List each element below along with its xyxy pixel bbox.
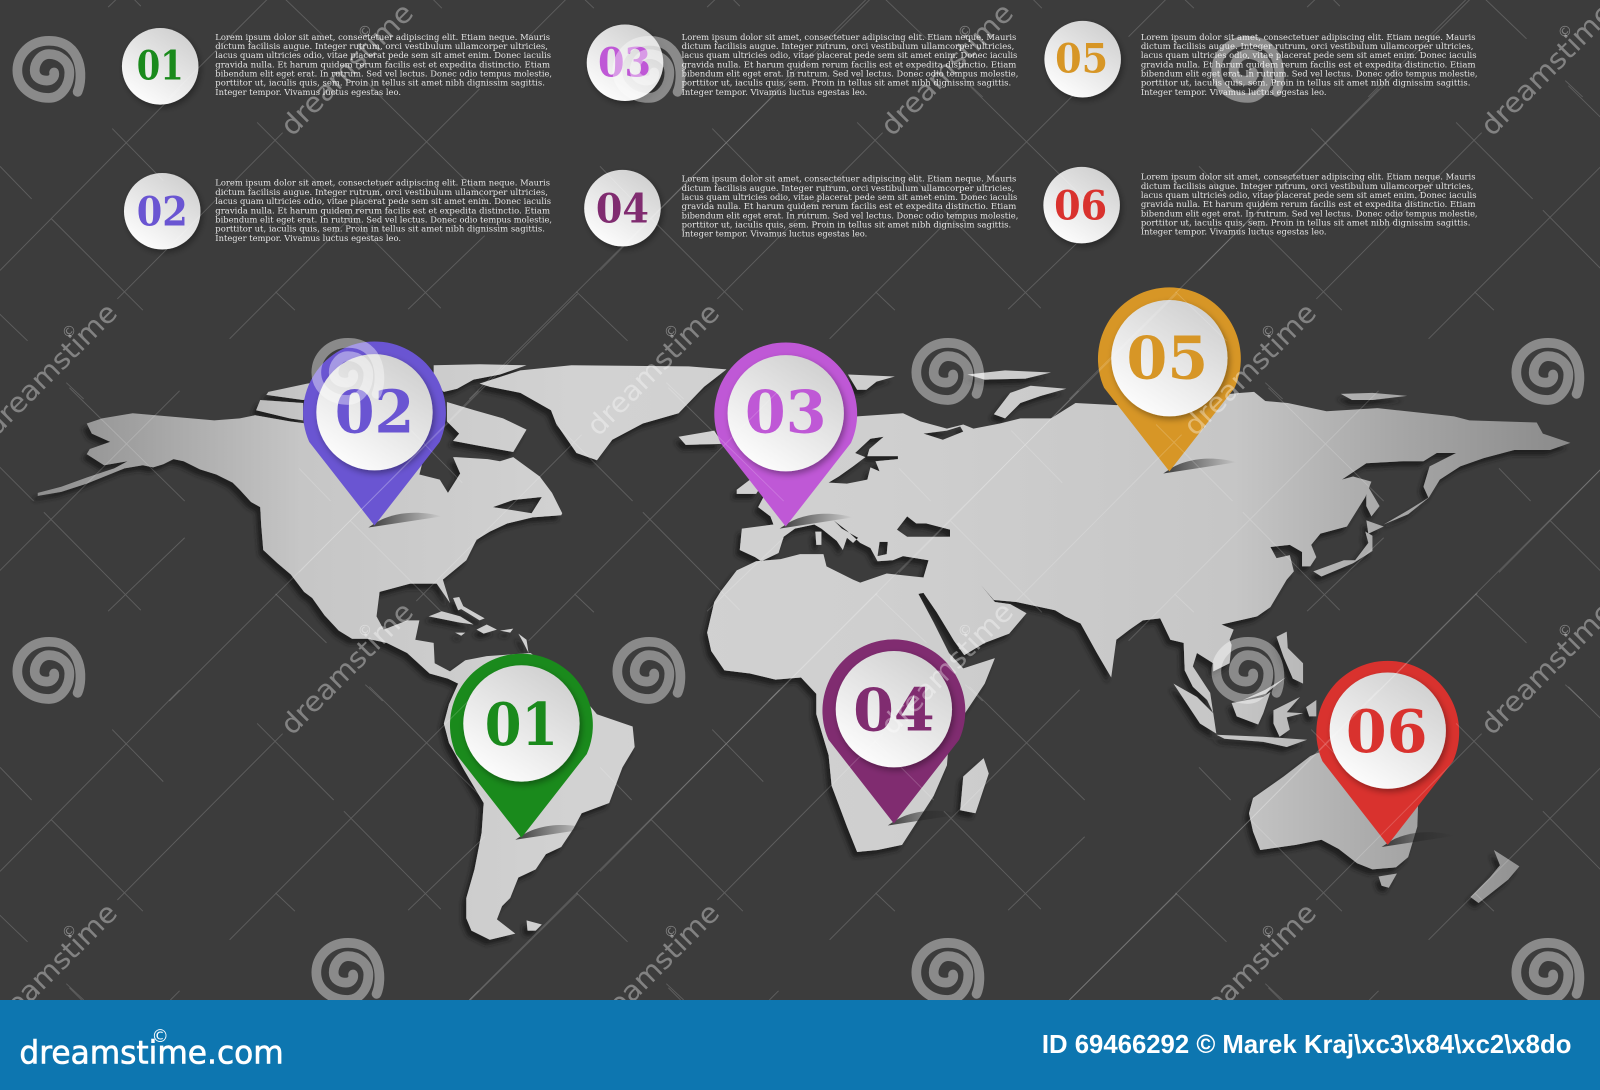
- pin 01: 01: [485, 689, 558, 759]
- watermark text: ©: [59, 321, 81, 343]
- text block 01: dictum facilisis augue. Integer rutrum, orci vestibulum ullamcorper ultricies,: [215, 41, 548, 51]
- text block 02: porttitor ut, iaculis quis, sem. Proin in tellus sit amet nibh dignissim sagittis.: [215, 224, 545, 234]
- text block 05: Lorem ipsum dolor sit amet, consectetuer adipiscing elit. Etiam neque. Mauris: [1141, 32, 1476, 42]
- text block 04: lacus quam ultricies odio, vitae placerat pede sem sit amet enim. Donec iaculis: [682, 192, 1017, 202]
- badge 01: [122, 28, 198, 105]
- map: Eurasia and Africa: [707, 392, 1570, 852]
- map: Greenland: [480, 365, 727, 460]
- pin 01: [450, 654, 593, 840]
- watermark text: dreamstime: [581, 897, 726, 1042]
- watermark text: dreamstime: [1177, 297, 1323, 442]
- text block 01: bibendum elit eget erat. In rutrum. Sed vel lectus. Donec odio tempus molestie,: [215, 69, 552, 79]
- watermark text: ©: [661, 921, 683, 943]
- watermark text: dreamstime: [274, 596, 420, 741]
- watermark text: ©: [955, 21, 976, 43]
- text block 05: lacus quam ultricies odio, vitae placerat pede sem sit amet enim. Donec iaculis: [1141, 50, 1477, 60]
- text block 02: Integer tempor. Vivamus luctus egestas leo.: [215, 233, 401, 243]
- text block 01: lacus quam ultricies odio, vitae placerat pede sem sit amet enim. Donec iaculis: [215, 50, 551, 60]
- text block 04: dictum facilisis augue. Integer rutrum, orci vestibulum ullamcorper ultricies,: [682, 183, 1014, 193]
- text block 03: dictum facilisis augue. Integer rutrum, orci vestibulum ullamcorper ultricies,: [682, 41, 1014, 51]
- text block 06: lacus quam ultricies odio, vitae placerat pede sem sit amet enim. Donec iaculis: [1141, 190, 1477, 200]
- pin 03: [714, 342, 857, 529]
- text block 04: porttitor ut, iaculis quis, sem. Proin in tellus sit amet nibh dignissim sagittis.: [682, 220, 1011, 230]
- watermark text: ©: [955, 620, 976, 642]
- text block 01: porttitor ut, iaculis quis, sem. Proin in tellus sit amet nibh dignissim sagittis.: [215, 78, 545, 88]
- text block 03: Integer tempor. Vivamus luctus egestas leo.: [682, 87, 867, 97]
- badge 06: [1043, 167, 1120, 243]
- watermark text: ©: [1258, 921, 1280, 943]
- badge 04: 04: [596, 186, 649, 232]
- text block 04: Lorem ipsum dolor sit amet, consectetuer adipiscing elit. Etiam neque. Mauris: [682, 174, 1016, 184]
- text block 04: bibendum elit eget erat. In rutrum. Sed vel lectus. Donec odio tempus molestie,: [682, 210, 1018, 220]
- text block 03: Lorem ipsum dolor sit amet, consectetuer adipiscing elit. Etiam neque. Mauris: [682, 32, 1016, 42]
- text block 04: [682, 174, 1018, 239]
- text block 06: Lorem ipsum dolor sit amet, consectetuer adipiscing elit. Etiam neque. Mauris: [1141, 172, 1476, 182]
- pin 05: [1098, 287, 1241, 473]
- watermark text: ©: [1555, 620, 1576, 642]
- text block 06: gravida nulla. Et harum quidem rerum facilis est et expedita distinctio. Etiam: [1141, 199, 1476, 209]
- footer logo: dreamstime.com: [19, 1035, 284, 1071]
- badge 05: [1044, 21, 1121, 97]
- text block 05: gravida nulla. Et harum quidem rerum facilis est et expedita distinctio. Etiam: [1141, 59, 1476, 69]
- map: South America: [444, 653, 635, 940]
- map: islands: [429, 370, 1519, 931]
- text block 01: [215, 32, 552, 97]
- text block 04: gravida nulla. Et harum quidem rerum facilis est et expedita distinctio. Etiam: [682, 201, 1016, 211]
- text block 05: Integer tempor. Vivamus luctus egestas leo.: [1141, 87, 1327, 97]
- text block 01: Lorem ipsum dolor sit amet, consectetuer adipiscing elit. Etiam neque. Mauris: [215, 32, 550, 42]
- map: Australia: [1249, 750, 1418, 869]
- text block 01: Integer tempor. Vivamus luctus egestas leo.: [215, 87, 401, 97]
- text block 02: Lorem ipsum dolor sit amet, consectetuer adipiscing elit. Etiam neque. Mauris: [215, 178, 550, 188]
- footer logo: ©: [152, 1027, 169, 1047]
- text block 02: bibendum elit eget erat. In rutrum. Sed vel lectus. Donec odio tempus molestie,: [215, 214, 552, 224]
- badge 01: 01: [137, 44, 184, 90]
- watermark text: dreamstime: [1177, 897, 1323, 1042]
- pin 03: 03: [745, 377, 827, 447]
- text block 02: lacus quam ultricies odio, vitae placerat pede sem sit amet enim. Donec iaculis: [215, 196, 551, 206]
- watermark text: dreamstime: [274, 0, 420, 142]
- text block 03: [682, 32, 1018, 97]
- text block 02: [215, 178, 552, 243]
- text block 03: gravida nulla. Et harum quidem rerum facilis est et expedita distinctio. Etiam: [682, 59, 1016, 69]
- text block 06: [1141, 172, 1478, 237]
- text block 03: porttitor ut, iaculis quis, sem. Proin in tellus sit amet nibh dignissim sagittis.: [682, 78, 1011, 88]
- watermark text: ©: [59, 921, 81, 943]
- pin 04: 04: [853, 675, 935, 745]
- text block 01: gravida nulla. Et harum quidem rerum facilis est et expedita distinctio. Etiam: [215, 59, 550, 69]
- text block 06: porttitor ut, iaculis quis, sem. Proin in tellus sit amet nibh dignissim sagittis.: [1141, 218, 1470, 228]
- badge 03: [587, 24, 663, 101]
- footer bar: [0, 1000, 1600, 1090]
- map: Arctic Canada islands: [256, 364, 527, 452]
- text block 05: porttitor ut, iaculis quis, sem. Proin in tellus sit amet nibh dignissim sagittis.: [1141, 78, 1470, 88]
- pin 06: [1316, 661, 1459, 847]
- footer image id and credit: ID 69466292 © Marek Kraj\xc3\x84\xc2\x8do: [1042, 1029, 1571, 1059]
- map: North America: [38, 413, 562, 684]
- pin 02: [303, 341, 446, 528]
- pin 06: 06: [1346, 696, 1428, 766]
- watermark text: dreamstime: [874, 596, 1020, 741]
- badge 04: [584, 170, 661, 246]
- world map: [38, 364, 1570, 940]
- badge 02: 02: [137, 190, 188, 236]
- text block 05: [1141, 32, 1478, 97]
- text block 03: bibendum elit eget erat. In rutrum. Sed vel lectus. Donec odio tempus molestie,: [682, 69, 1018, 79]
- text block 06: Integer tempor. Vivamus luctus egestas leo.: [1141, 227, 1327, 237]
- watermark text: ©: [1258, 321, 1280, 343]
- watermark text: ©: [1555, 21, 1576, 43]
- text block 05: bibendum elit eget erat. In rutrum. Sed vel lectus. Donec odio tempus molestie,: [1141, 69, 1478, 79]
- text block 02: gravida nulla. Et harum quidem rerum facilis est et expedita distinctio. Etiam: [215, 205, 550, 215]
- pin 04: [822, 639, 965, 826]
- watermark text: ©: [661, 321, 683, 343]
- badge 06: 06: [1054, 183, 1107, 229]
- watermark text: ©: [355, 21, 376, 43]
- text block 03: lacus quam ultricies odio, vitae placerat pede sem sit amet enim. Donec iaculis: [682, 50, 1017, 60]
- text block 05: dictum facilisis augue. Integer rutrum, orci vestibulum ullamcorper ultricies,: [1141, 41, 1473, 51]
- pin 02: 02: [335, 377, 414, 447]
- text block 04: Integer tempor. Vivamus luctus egestas leo.: [682, 229, 867, 239]
- badge 03: 03: [598, 41, 651, 87]
- watermark text: ©: [355, 620, 376, 642]
- badge 02: [124, 173, 201, 249]
- badge 05: 05: [1055, 36, 1108, 82]
- text block 02: dictum facilisis augue. Integer rutrum, orci vestibulum ullamcorper ultricies,: [215, 187, 548, 197]
- watermark text: dreamstime: [581, 297, 726, 442]
- watermark text: dreamstime: [874, 0, 1020, 142]
- pin 05: 05: [1127, 323, 1208, 393]
- text block 06: dictum facilisis augue. Integer rutrum, orci vestibulum ullamcorper ultricies,: [1141, 181, 1473, 191]
- text block 06: bibendum elit eget erat. In rutrum. Sed vel lectus. Donec odio tempus molestie,: [1141, 208, 1478, 218]
